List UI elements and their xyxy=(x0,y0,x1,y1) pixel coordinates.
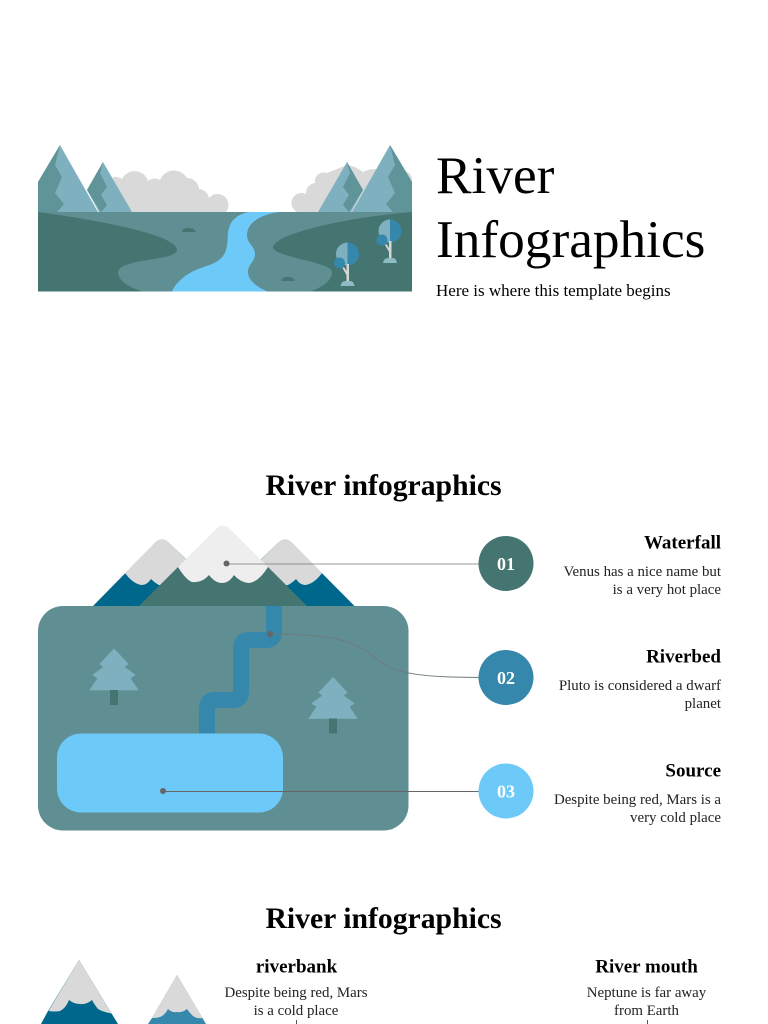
ground xyxy=(38,212,412,292)
clouds right xyxy=(291,165,412,212)
heading: section 3: River infographics xyxy=(265,903,502,935)
mountains right xyxy=(318,145,412,212)
heading: section 2: River infographics xyxy=(265,470,502,502)
step 01 text: Waterfall xyxy=(644,532,721,554)
step 03 text: very cold place xyxy=(630,810,721,826)
title: River xyxy=(436,146,555,205)
subtitle: Here is where this template begins xyxy=(436,281,671,300)
mountains left xyxy=(38,145,132,212)
illustration: mountain and lake xyxy=(38,526,408,830)
step 01 text: Venus has a nice name but xyxy=(563,564,722,580)
step 02 text xyxy=(559,646,722,712)
step 03 badge: 03 xyxy=(497,782,515,802)
step 02 text: planet xyxy=(685,696,722,712)
riverbank text: riverbank xyxy=(256,956,338,978)
title: Infographics xyxy=(436,210,705,269)
step 01 text xyxy=(563,532,722,598)
center mountain xyxy=(139,540,307,606)
icon: small mountain xyxy=(148,975,206,1024)
pine right xyxy=(309,678,357,734)
icon: large mountain xyxy=(41,960,118,1024)
river mouth text: from Earth xyxy=(614,1003,680,1019)
step 03 text: Source xyxy=(665,760,721,782)
step 02 badge: 02 xyxy=(497,668,515,688)
step 02 badge xyxy=(478,650,534,705)
river mouth text xyxy=(587,956,707,1024)
step 02 text: Riverbed xyxy=(646,646,721,668)
center snow xyxy=(178,526,268,583)
callout line 02 xyxy=(267,631,480,678)
riverbank text: Despite being red, Mars xyxy=(224,985,368,1001)
title xyxy=(436,146,705,269)
right dark hill xyxy=(273,212,412,292)
river mouth text: Neptune is far away xyxy=(587,985,707,1001)
left dark hill xyxy=(38,212,177,292)
bush left xyxy=(182,228,196,232)
callout line 03 xyxy=(160,788,480,794)
tree far xyxy=(376,220,402,263)
clouds left xyxy=(113,170,229,212)
step 02 text: Pluto is considered a dwarf xyxy=(559,678,721,694)
step 01 badge xyxy=(478,536,534,591)
step 03 text xyxy=(554,760,721,826)
pine left xyxy=(90,649,138,705)
step 03 text: Despite being red, Mars is a xyxy=(554,792,721,808)
back mountains xyxy=(93,540,354,606)
riverbank text xyxy=(224,956,368,1024)
tree near xyxy=(334,242,359,286)
callout line 01 xyxy=(224,560,480,566)
riverbank text: is a cold place xyxy=(254,1003,339,1019)
bush right xyxy=(281,277,295,281)
step 01 text: is a very hot place xyxy=(613,582,721,598)
step 01 badge: 01 xyxy=(497,554,515,574)
land panel xyxy=(38,606,408,830)
stream xyxy=(207,606,274,736)
river xyxy=(172,212,280,292)
river mouth text: River mouth xyxy=(595,956,698,978)
step 03 badge xyxy=(478,764,534,818)
illustration: river landscape xyxy=(38,145,412,292)
lake xyxy=(57,734,283,812)
